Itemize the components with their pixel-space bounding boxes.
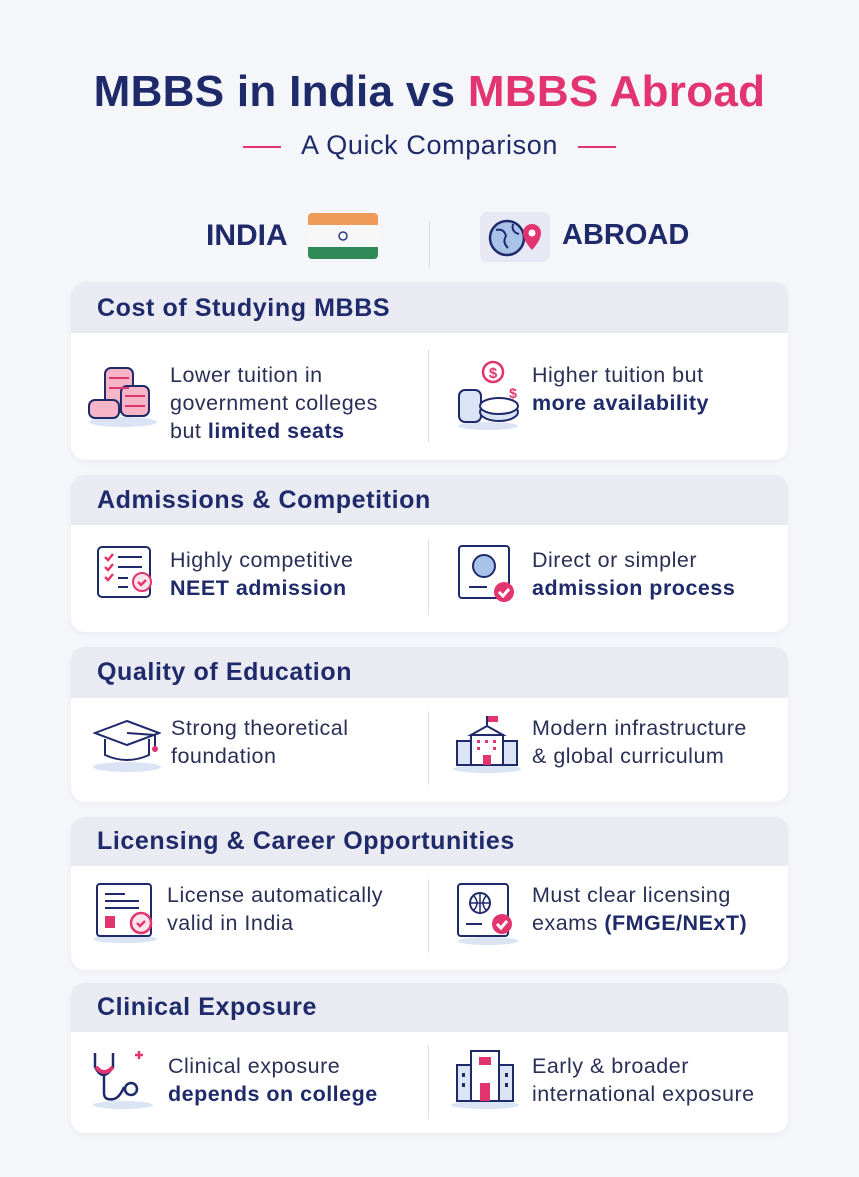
heading: quality bbox=[71, 647, 788, 698]
text: abroad clinical: Early & broader bbox=[532, 1054, 689, 1078]
text: abroad quality: & global curriculum bbox=[532, 744, 724, 768]
heading: quality: Quality of Education bbox=[97, 658, 352, 686]
icon: hospital bbox=[451, 1050, 519, 1109]
title: MBBS in India vs MBBS Abroad bbox=[94, 67, 765, 116]
heading: clinical: Clinical Exposure bbox=[97, 993, 317, 1021]
text: india quality: Strong theoretical bbox=[171, 716, 349, 740]
heading: licensing: Licensing & Career Opportunities bbox=[97, 827, 515, 855]
text: abroad clinical: international exposure bbox=[532, 1082, 755, 1106]
text: abroad admissions: Direct or simpler bbox=[532, 548, 697, 572]
text: india cost: Lower tuition in bbox=[170, 363, 323, 387]
icon: indian flag bbox=[308, 213, 378, 259]
text: india clinical: depends on college bbox=[168, 1082, 378, 1106]
icon: stethoscope bbox=[93, 1051, 153, 1109]
panel: quality bbox=[71, 647, 788, 802]
heading: cost: Cost of Studying MBBS bbox=[97, 294, 390, 322]
text: india quality bbox=[171, 716, 349, 768]
text: india quality: foundation bbox=[171, 744, 276, 768]
text: abroad cost: more availability bbox=[532, 391, 709, 415]
text: india licensing: valid in India bbox=[167, 911, 294, 935]
text: india cost: government colleges bbox=[170, 391, 378, 415]
icon: checklist bbox=[97, 546, 152, 598]
heading: cost bbox=[71, 282, 788, 333]
panel: admissions bbox=[71, 475, 788, 632]
text: abroad quality bbox=[532, 716, 747, 768]
heading: admissions: Admissions & Competition bbox=[97, 486, 431, 514]
icon: dollar coins bbox=[458, 360, 519, 430]
icon: passport check bbox=[457, 883, 518, 945]
column header: Abroad: ABROAD bbox=[562, 219, 689, 251]
text: india clinical bbox=[168, 1054, 378, 1106]
text: abroad licensing: Must clear licensing bbox=[532, 883, 731, 907]
text: india licensing bbox=[167, 883, 383, 935]
column header: India bbox=[206, 213, 378, 259]
panel: clinical bbox=[71, 983, 788, 1133]
text: india licensing: License automatically bbox=[167, 883, 383, 907]
panel: cost bbox=[71, 282, 788, 460]
text: india admissions bbox=[170, 548, 353, 600]
icon: university building bbox=[453, 716, 521, 773]
column header: India: INDIA bbox=[206, 219, 288, 252]
column header: Abroad bbox=[480, 212, 689, 262]
text: india cost bbox=[170, 363, 378, 443]
icon: coins bbox=[88, 367, 157, 427]
icon: document globe bbox=[458, 545, 514, 602]
subtitle: A Quick Comparison bbox=[301, 130, 558, 160]
text: abroad clinical bbox=[532, 1054, 755, 1106]
text: india cost: but limited seats bbox=[170, 419, 345, 443]
text: abroad admissions bbox=[532, 548, 735, 600]
icon: graduation cap bbox=[93, 720, 161, 772]
icon: license certificate bbox=[93, 883, 157, 943]
text: abroad licensing bbox=[532, 883, 747, 935]
text: abroad quality: Modern infrastructure bbox=[532, 716, 747, 740]
text: abroad licensing: exams (FMGE/NExT) bbox=[532, 911, 747, 935]
text: abroad admissions: admission process bbox=[532, 576, 735, 600]
icon: globe pin bbox=[480, 212, 550, 262]
text: india admissions: NEET admission bbox=[170, 576, 347, 600]
text: abroad cost bbox=[532, 363, 709, 415]
heading: admissions bbox=[71, 475, 788, 525]
text: india admissions: Highly competitive bbox=[170, 548, 353, 572]
text: india clinical: Clinical exposure bbox=[168, 1054, 340, 1078]
heading: licensing bbox=[71, 817, 788, 866]
icon: dollar coins: $ bbox=[489, 365, 498, 382]
heading: clinical bbox=[71, 983, 788, 1032]
text: abroad cost: Higher tuition but bbox=[532, 363, 704, 387]
panel: licensing bbox=[71, 817, 788, 970]
icon: dollar coins: $ bbox=[509, 385, 517, 401]
